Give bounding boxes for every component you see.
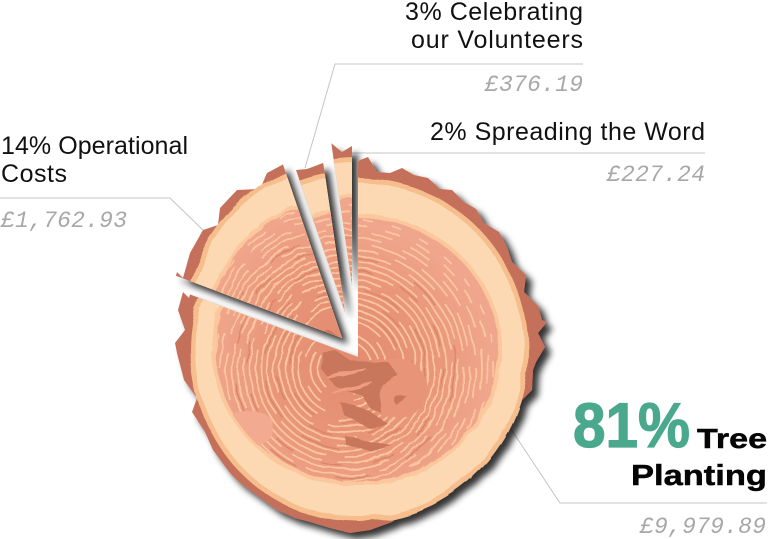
wedge: 81% tree planting	[175, 157, 547, 533]
label: 81% tree planting: 81%	[573, 391, 690, 461]
label: 2% spreading the word: 2% Spreading the Word	[430, 118, 705, 146]
label: 3% celebrating our volunteers: our Volunteers	[411, 26, 583, 54]
wedge: 2% spreading the word	[331, 143, 364, 290]
leader line: operational costs	[0, 198, 206, 233]
label: 14% operational costs: Costs	[1, 160, 67, 188]
wedge: 3% celebrating volunteers	[296, 162, 355, 318]
label: 81% tree planting: Planting	[631, 460, 767, 492]
label: 2% spreading the word: £227.24	[606, 162, 705, 188]
label: 14% operational costs: 14% Operational	[1, 132, 188, 160]
leader line: volunteers	[305, 64, 583, 168]
label: 14% operational costs	[0, 132, 188, 234]
tree slice pie chart	[169, 137, 547, 533]
label: 3% celebrating our volunteers	[405, 0, 583, 98]
wedge: 14% operational costs	[176, 164, 352, 348]
label: 14% operational costs: £1,762.93	[0, 208, 127, 234]
label: 81% tree planting	[573, 391, 767, 539]
label: 2% spreading the word	[430, 118, 705, 188]
leader line: spreading the word	[352, 152, 705, 154]
label: 81% tree planting: Tree	[697, 423, 767, 454]
label: 3% celebrating our volunteers: £376.19	[484, 72, 583, 98]
leader line: tree planting	[505, 420, 767, 503]
